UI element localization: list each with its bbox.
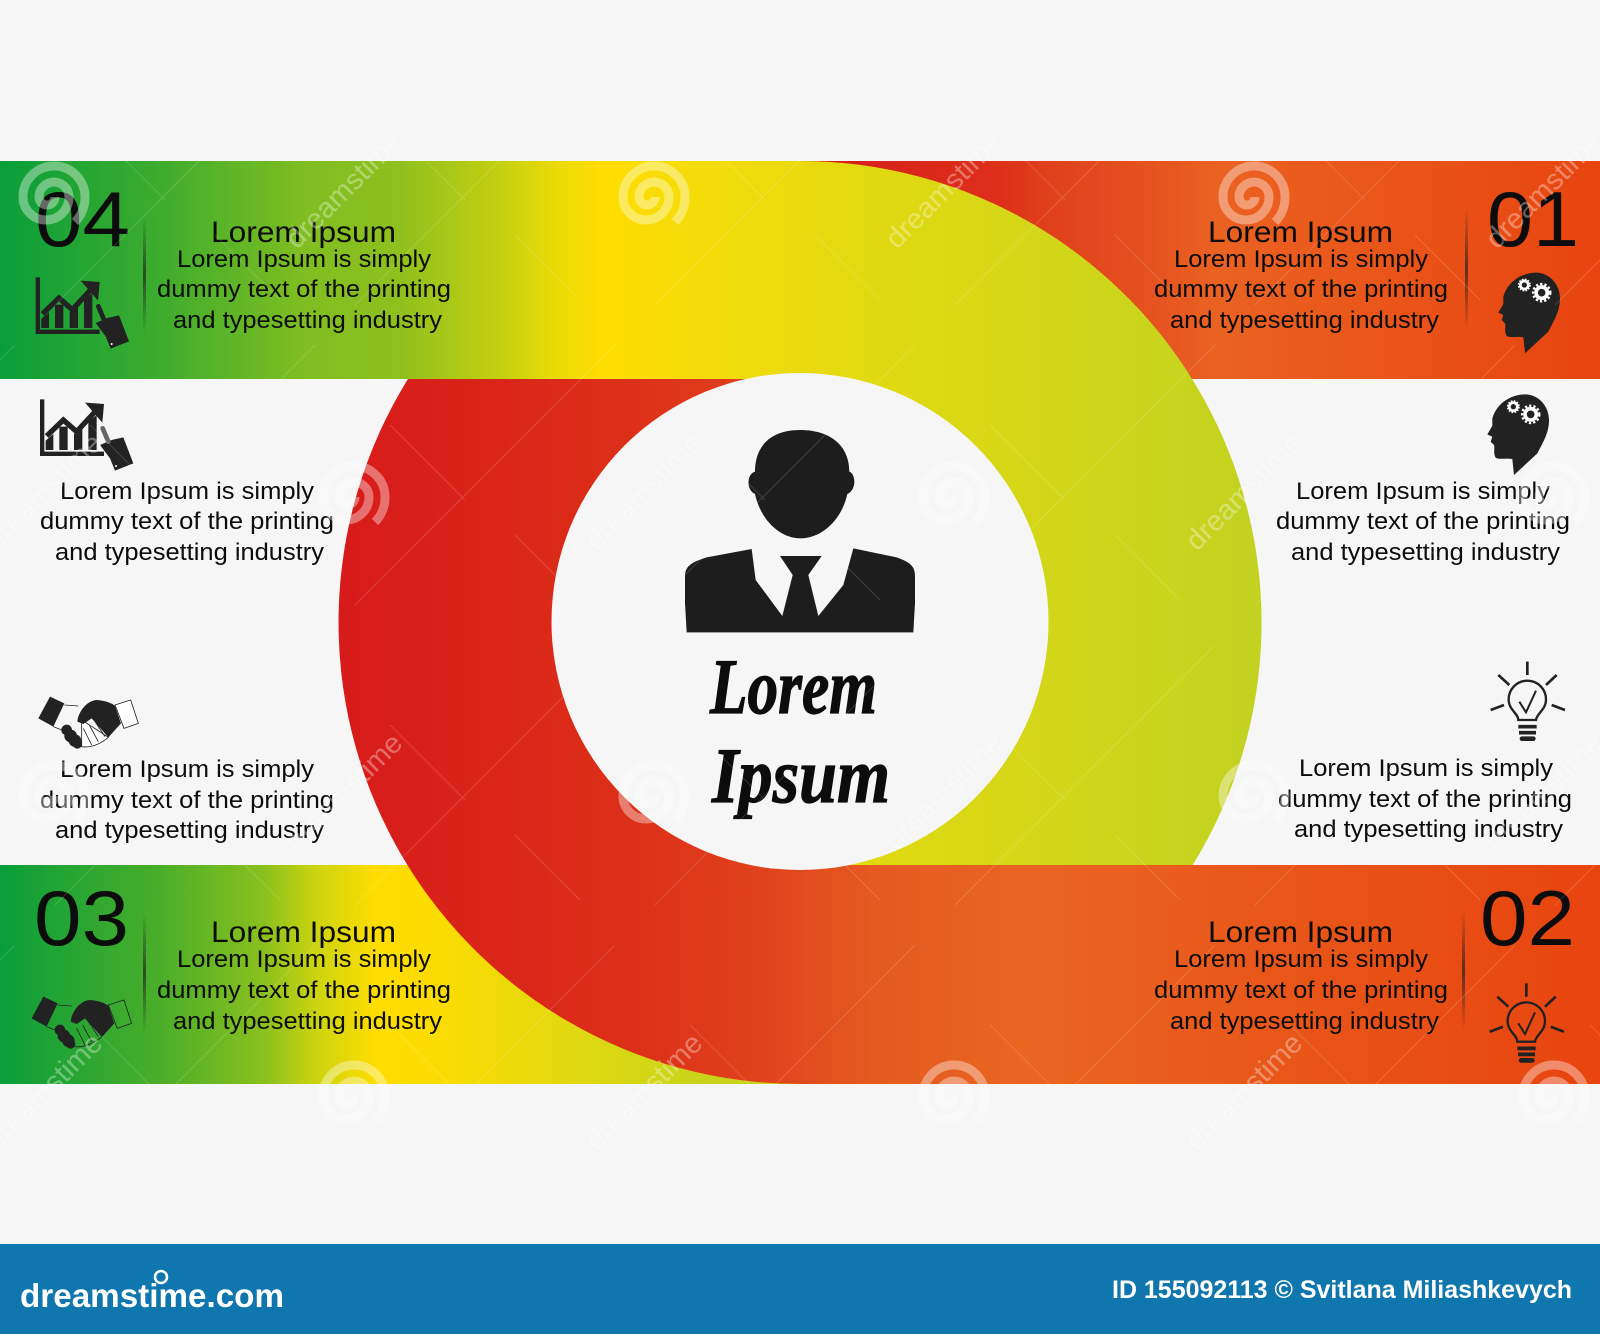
text: left lower: and typesetting industry xyxy=(55,817,325,844)
number 01: 01 xyxy=(1487,175,1579,263)
watermark overlay: dreamstime xyxy=(879,125,1009,255)
number 04: 04 xyxy=(35,175,130,263)
heading 02: Lorem Ipsum xyxy=(1208,916,1393,949)
body 04: dummy text of the printing xyxy=(157,276,451,303)
watermark overlay: dreamstime xyxy=(1179,1027,1309,1157)
center title: Ipsum xyxy=(711,732,890,819)
text: right lower: Lorem Ipsum is simply xyxy=(1299,755,1554,782)
side block: left lower xyxy=(38,697,334,844)
icon: businessman xyxy=(685,430,915,632)
band: top right red-orange xyxy=(800,161,1600,379)
body 01: dummy text of the printing xyxy=(1154,276,1448,303)
body 02 xyxy=(1154,946,1448,1035)
text: right upper: and typesetting industry xyxy=(1291,539,1561,566)
separator 03 xyxy=(143,913,146,1033)
panel 04 xyxy=(35,175,451,349)
center title xyxy=(709,643,890,819)
text: left lower xyxy=(40,756,334,844)
icon: light bulb 02 xyxy=(1490,983,1564,1060)
watermark overlay: dreamstime xyxy=(279,727,409,857)
text: left upper: Lorem Ipsum is simply xyxy=(60,478,315,505)
body 01: Lorem Ipsum is simply xyxy=(1174,246,1429,273)
watermark overlay xyxy=(0,125,1600,1157)
side block: right upper xyxy=(1276,394,1570,566)
watermark overlay: dreamstime xyxy=(879,727,1009,857)
body 04: Lorem Ipsum is simply xyxy=(177,246,432,273)
text: right lower xyxy=(1278,755,1572,843)
text: right lower: dummy text of the printing xyxy=(1278,786,1572,813)
footer logo: dreamstime.com xyxy=(20,1277,284,1314)
body 03: and typesetting industry xyxy=(173,1008,443,1035)
band: bottom left green-yellow xyxy=(0,865,800,1084)
body 04: and typesetting industry xyxy=(173,307,443,334)
separator 01 xyxy=(1465,208,1468,330)
watermark overlay: dreamstime xyxy=(279,125,409,255)
text: left upper: dummy text of the printing xyxy=(40,508,334,535)
body 01 xyxy=(1154,246,1448,334)
panel 03 xyxy=(32,874,451,1049)
text: right lower: and typesetting industry xyxy=(1294,816,1564,843)
watermark overlay: dreamstime xyxy=(579,1027,709,1157)
heading 01: Lorem Ipsum xyxy=(1208,216,1393,249)
text: right upper xyxy=(1276,478,1570,566)
panel 01 xyxy=(1154,175,1579,353)
text: left lower: dummy text of the printing xyxy=(40,787,334,814)
text: left upper: and typesetting industry xyxy=(55,539,325,566)
watermark overlay: dreamstime xyxy=(1179,427,1309,557)
heading 03: Lorem Ipsum xyxy=(211,916,396,949)
icon: chart with hand xyxy=(40,399,133,471)
number 02: 02 xyxy=(1480,874,1575,962)
panel 02 xyxy=(1154,874,1575,1060)
body 03: dummy text of the printing xyxy=(157,977,451,1004)
watermark overlay: dreamstime xyxy=(579,427,709,557)
footer credit: ID 155092113 © Svitlana Miliashkevych xyxy=(1112,1276,1572,1304)
text: left lower: Lorem Ipsum is simply xyxy=(60,756,315,783)
side block: left upper xyxy=(40,399,334,566)
icon: light bulb xyxy=(1491,662,1565,739)
number 03: 03 xyxy=(34,874,129,962)
body 02: and typesetting industry xyxy=(1170,1008,1440,1035)
ribbon: top band and right half ring, green to lime xyxy=(0,161,1262,865)
side block: right lower xyxy=(1278,662,1572,843)
separator 04 xyxy=(143,217,146,333)
body 02: dummy text of the printing xyxy=(1154,977,1448,1004)
heading 04: Lorem Ipsum xyxy=(211,216,396,249)
body 03: Lorem Ipsum is simply xyxy=(177,946,432,973)
text: left upper xyxy=(40,478,334,566)
body 03 xyxy=(157,946,451,1035)
body 04 xyxy=(157,246,451,334)
footer bar xyxy=(0,1244,1600,1334)
center title: Lorem xyxy=(709,643,877,730)
center white circle xyxy=(552,373,1048,870)
icon: head with gears xyxy=(1487,394,1549,475)
icon: head with gears 01 xyxy=(1498,273,1560,353)
icon: chart with hand 04 xyxy=(36,277,129,349)
body 02: Lorem Ipsum is simply xyxy=(1174,946,1429,973)
separator 02 xyxy=(1462,910,1465,1030)
text: right upper: Lorem Ipsum is simply xyxy=(1296,478,1551,505)
icon: handshake 03 xyxy=(32,997,132,1049)
body 01: and typesetting industry xyxy=(1170,307,1440,334)
icon: handshake xyxy=(38,697,138,749)
text: right upper: dummy text of the printing xyxy=(1276,508,1570,535)
ribbon: left half ring and bottom band, red to orange xyxy=(339,379,1600,1084)
